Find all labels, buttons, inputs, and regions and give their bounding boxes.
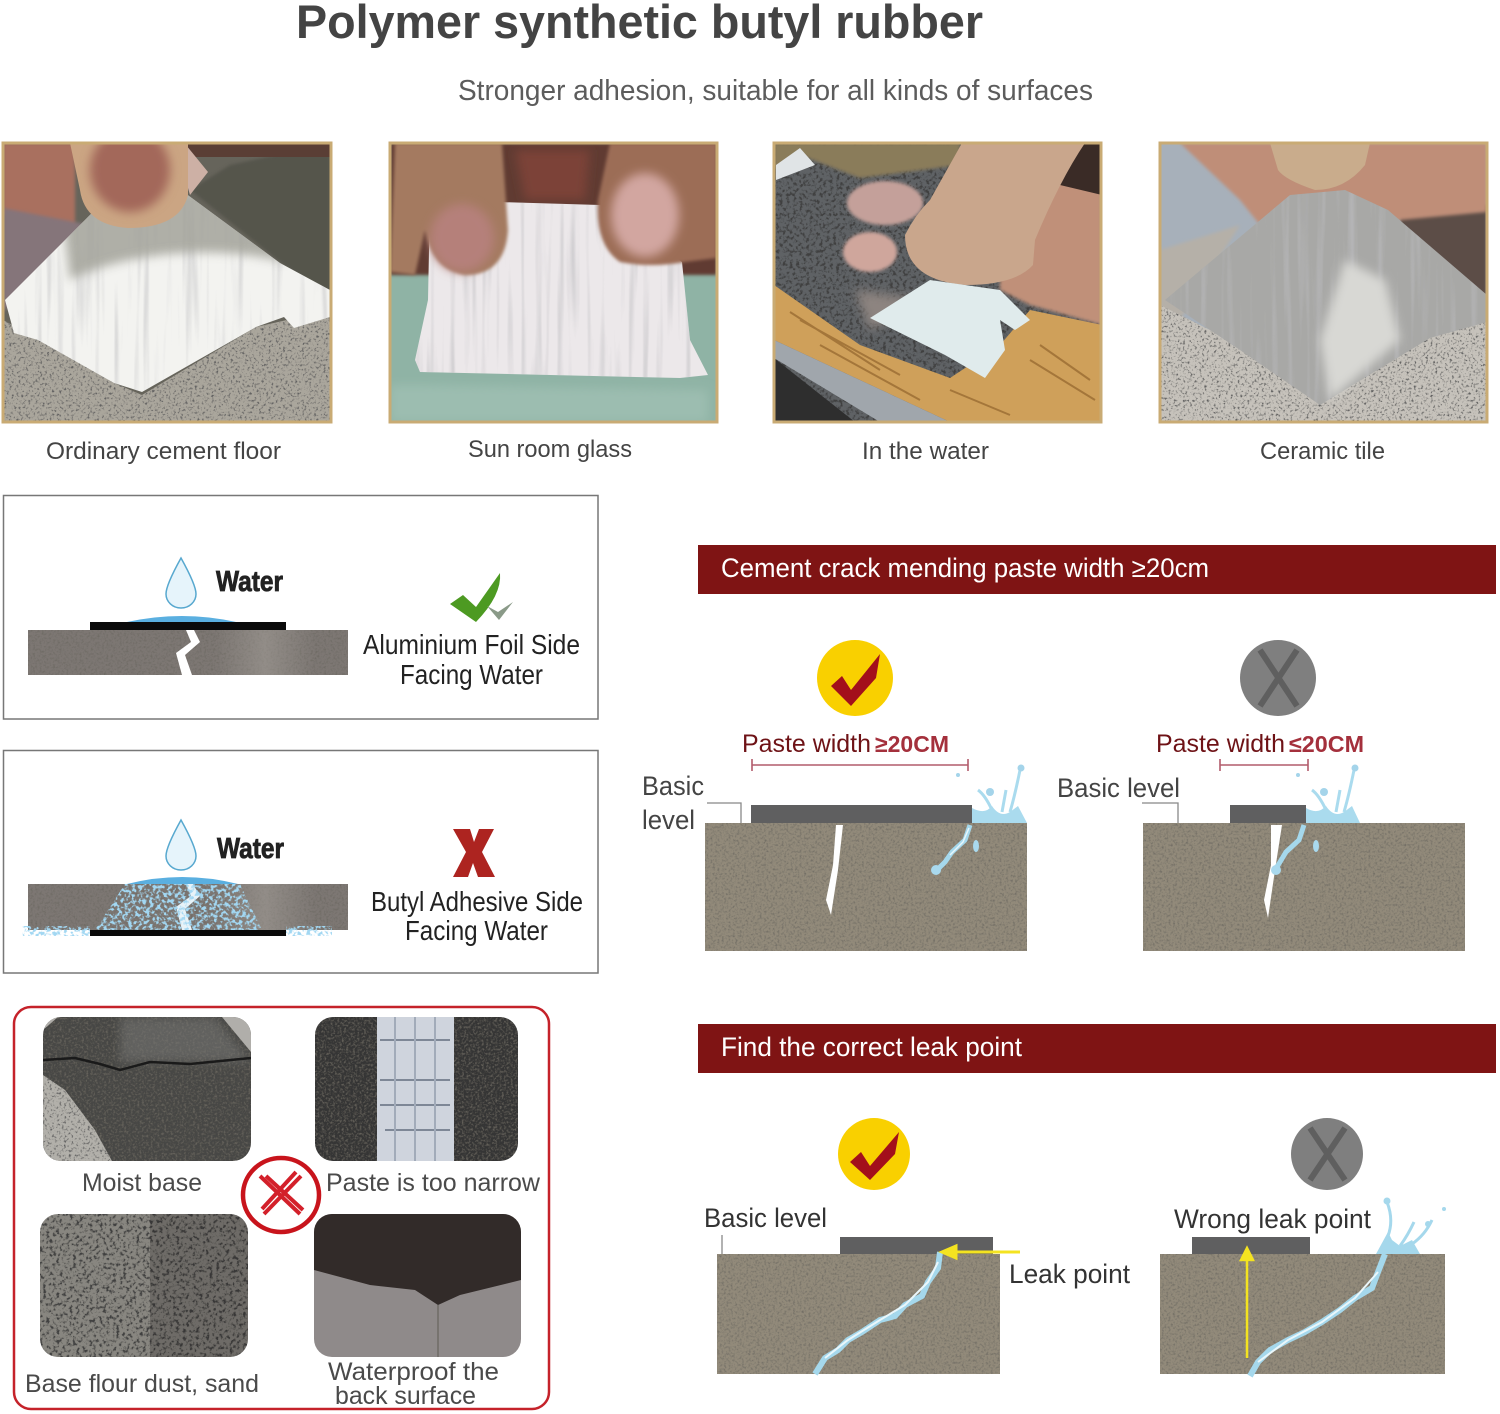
label: water: Water xyxy=(217,833,284,865)
crack xyxy=(1264,825,1282,918)
photo: moist base xyxy=(43,1017,251,1161)
caption: base flour dust: Base flour dust, sand xyxy=(25,1370,259,1398)
label: paste width: Paste width xyxy=(742,730,871,758)
caption: in the water: In the water xyxy=(862,438,989,465)
label: basic level: Basic level xyxy=(1057,773,1180,803)
faded check xyxy=(487,602,513,620)
photo: ordinary cement floor xyxy=(3,128,331,422)
label: leak point: Leak point xyxy=(1009,1259,1130,1289)
photo: ceramic tile xyxy=(1160,143,1487,422)
banner: cement crack: Cement crack mending paste width ≥20cm xyxy=(721,553,1209,583)
concrete block with crack xyxy=(28,630,348,675)
icon: water drop xyxy=(166,820,196,870)
concrete block with seeping water xyxy=(28,877,348,930)
photo: waterproof the back xyxy=(314,1214,521,1357)
photo: base flour dust xyxy=(40,1214,248,1357)
width marker xyxy=(752,759,968,771)
diagram: correct leak point xyxy=(704,1118,1130,1374)
caption: ceramic tile: Ceramic tile xyxy=(1260,438,1385,465)
diagram: wrong leak point xyxy=(1160,1118,1446,1376)
arrow: wrong point xyxy=(1241,1248,1253,1358)
label: basic: Basic xyxy=(642,771,704,801)
photo: in the water xyxy=(774,143,1102,422)
water splash xyxy=(1271,764,1360,875)
foil strip xyxy=(90,622,286,630)
label: facing water: Facing Water xyxy=(400,659,543,690)
label: wrong leak point: Wrong leak point xyxy=(1174,1204,1371,1234)
width marker xyxy=(1220,759,1308,771)
icon: grey x xyxy=(1291,1118,1363,1190)
tape xyxy=(1230,805,1306,823)
arrow: leak point xyxy=(942,1246,1020,1258)
icon: red crossed circle xyxy=(243,1158,319,1232)
label: paste width: Paste width xyxy=(1156,730,1285,758)
subtitle: Stronger adhesion, suitable for all kinds of surfaces xyxy=(458,75,1093,107)
water puddle xyxy=(127,616,236,622)
banner: find leak point xyxy=(698,1024,1496,1073)
caption: ordinary cement floor: Ordinary cement floor xyxy=(46,438,281,465)
icon: yellow check xyxy=(817,640,893,716)
icon: grey x xyxy=(1240,640,1316,716)
escaped water right xyxy=(286,926,332,936)
cement block xyxy=(1160,1254,1445,1374)
tape xyxy=(751,805,972,823)
icon: water drop xyxy=(166,558,196,608)
cement block xyxy=(717,1254,1000,1374)
icon: red x xyxy=(453,829,495,877)
water splash xyxy=(931,764,1027,875)
banner: find leak point: Find the correct leak point xyxy=(721,1032,1022,1062)
icon: green check xyxy=(450,573,500,622)
panel: aluminium foil side facing water xyxy=(4,496,598,719)
label: basic level: Basic level xyxy=(704,1203,827,1233)
caption: back surface: back surface xyxy=(335,1382,476,1410)
leader line xyxy=(707,803,741,823)
label: value: ≤20CM xyxy=(1289,731,1364,757)
caption: paste too narrow: Paste is too narrow xyxy=(326,1169,541,1197)
water leak xyxy=(815,1252,940,1374)
label: value: ≥20CM xyxy=(875,731,949,757)
panel: butyl adhesive side facing water xyxy=(4,750,598,973)
caption: waterproof the: Waterproof the xyxy=(328,1358,499,1386)
cement block xyxy=(705,823,1027,951)
diagram: incorrect paste width xyxy=(1057,640,1465,951)
tape xyxy=(840,1237,993,1254)
diagram: correct paste width xyxy=(642,640,1027,951)
cement block xyxy=(1143,823,1465,951)
caption: moist base: Moist base xyxy=(82,1169,202,1197)
tape xyxy=(1192,1237,1310,1254)
caption: sun room glass: Sun room glass xyxy=(468,436,632,463)
water leak xyxy=(1250,1254,1385,1376)
icon: yellow check xyxy=(838,1118,910,1190)
crack xyxy=(826,825,843,915)
leader line xyxy=(1142,803,1178,823)
photo: sun room glass xyxy=(390,143,717,422)
photo: paste too narrow xyxy=(315,1017,518,1161)
label: aluminium foil side: Aluminium Foil Side xyxy=(363,629,580,660)
panel: common mistakes xyxy=(14,1007,549,1410)
label: water: Water xyxy=(216,566,283,598)
escaped water left xyxy=(22,926,90,936)
banner: cement crack xyxy=(698,545,1496,594)
leader line xyxy=(721,1235,723,1254)
label: facing water: Facing Water xyxy=(405,915,548,946)
water splash xyxy=(1376,1198,1446,1254)
foil strip xyxy=(90,930,286,936)
label: butyl adhesive side: Butyl Adhesive Side xyxy=(371,886,583,917)
label: level: level xyxy=(642,805,695,835)
